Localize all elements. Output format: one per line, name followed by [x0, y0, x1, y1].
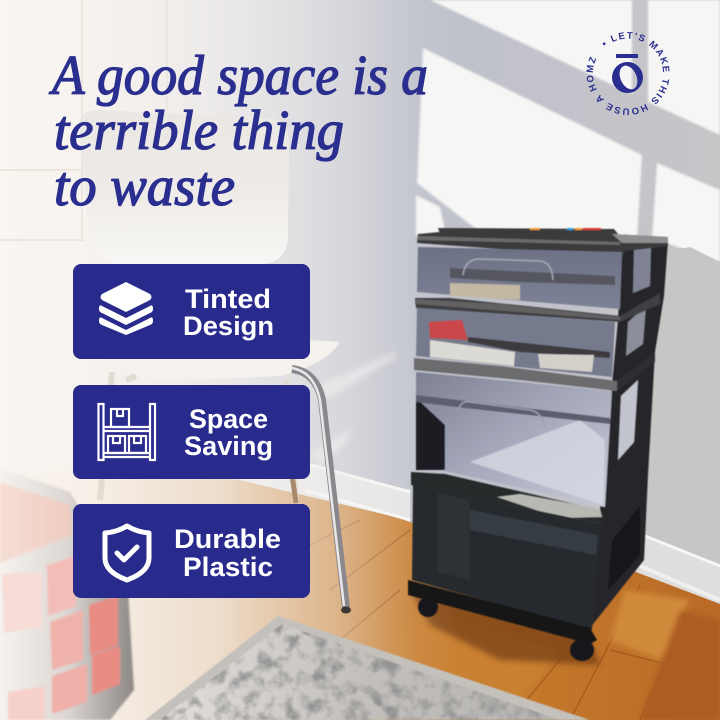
rim 3 [414, 358, 617, 391]
floor [0, 470, 720, 720]
drawer 1 [417, 247, 622, 309]
chair rear legs [100, 372, 296, 503]
label [184, 404, 273, 461]
macron bar [616, 54, 638, 58]
title: to waste [54, 156, 235, 218]
drawer cart [408, 228, 668, 661]
bottom black drawer [412, 485, 602, 630]
floor colour variation [380, 590, 720, 720]
hanging files [0, 482, 72, 563]
icon: shield with check [105, 526, 149, 580]
chrome front leg [292, 369, 346, 608]
wall right of cart shadow [640, 247, 720, 600]
red tiles [2, 556, 120, 720]
label: Tinted [185, 284, 271, 314]
sunlight patches on wall [416, 0, 720, 262]
icon: stacked layers [99, 282, 153, 335]
title: A good space is a [48, 45, 428, 107]
rug [145, 616, 590, 720]
label: Design [183, 311, 274, 341]
label: Plastic [183, 552, 273, 582]
panel: Tinted Design [73, 264, 310, 359]
chair back [79, 110, 289, 264]
faint sunlight streaks on wall [310, 352, 395, 465]
label [174, 524, 281, 582]
floor plank lines [280, 520, 690, 720]
label: Space [189, 404, 268, 434]
title: terrible thing [54, 100, 344, 162]
drawer 2 [416, 308, 615, 377]
title [48, 45, 428, 218]
o mark [612, 62, 643, 93]
logo badge [586, 32, 670, 116]
top rim [417, 232, 668, 258]
drawer 3 clear [416, 372, 612, 507]
chair seat [108, 340, 340, 381]
chair [79, 110, 351, 614]
cart shadow on floor [410, 590, 600, 665]
label: Durable [174, 524, 281, 554]
window frame lines on faded wall [0, 0, 167, 240]
rim 2 [415, 293, 660, 322]
side windows [633, 248, 651, 293]
wheels [418, 597, 438, 617]
label [183, 284, 274, 341]
label: Saving [184, 431, 273, 461]
file crate lower left [0, 468, 134, 720]
panel: Durable Plastic [73, 504, 310, 598]
circular tagline: • LET'S MAKE THIS HOUSE A HOMZ [586, 32, 670, 116]
cart right side frame [590, 240, 668, 628]
rim 4 with highlight [411, 472, 606, 524]
baseboard [240, 458, 720, 604]
base rim [408, 580, 597, 644]
panel: Space Saving [73, 385, 310, 479]
icon: shelf with boxes [98, 404, 155, 460]
top tray with markers [438, 228, 618, 234]
crate frame [0, 468, 134, 720]
